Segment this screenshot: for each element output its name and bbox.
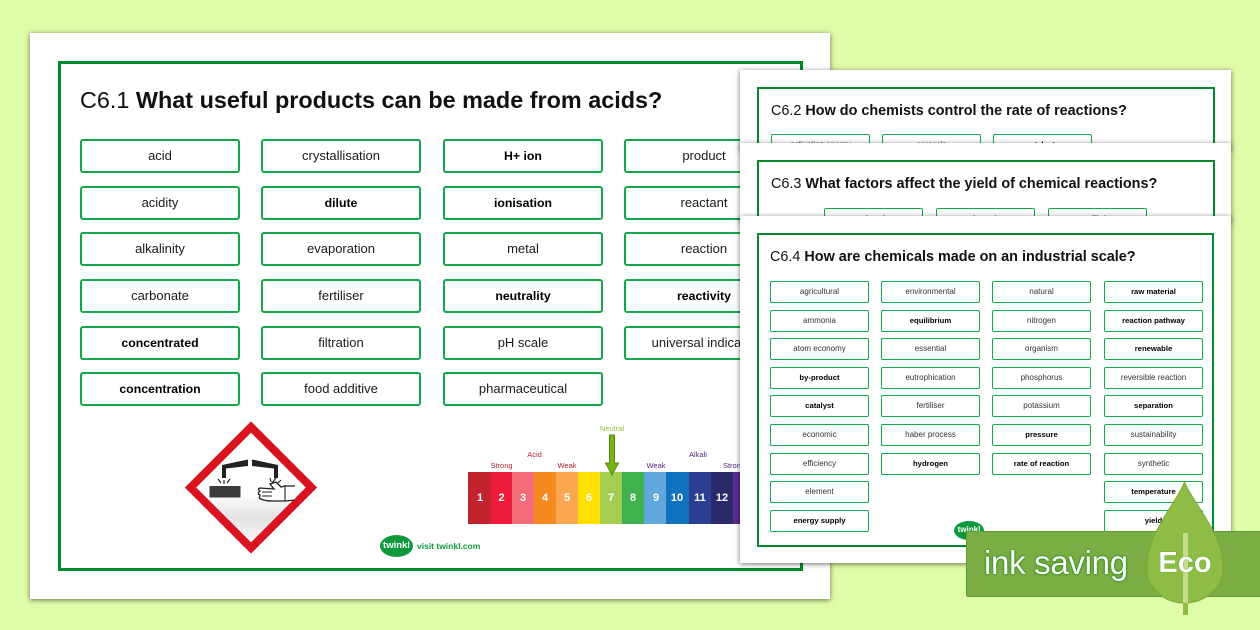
word card: phosphorus bbox=[1021, 373, 1062, 382]
word card bbox=[992, 367, 1091, 389]
banner text: ink saving bbox=[984, 544, 1128, 581]
word card: H+ ion bbox=[504, 149, 542, 163]
word card: essential bbox=[915, 344, 946, 353]
icon: Eco leaf bbox=[1146, 480, 1224, 615]
word card: evaporation bbox=[307, 241, 375, 256]
word card bbox=[624, 232, 784, 266]
word card bbox=[443, 326, 603, 360]
word card: yield bbox=[1145, 516, 1162, 525]
word card bbox=[770, 310, 869, 332]
word card bbox=[1104, 510, 1203, 532]
word card bbox=[770, 453, 869, 475]
word card: catalyst bbox=[805, 401, 834, 410]
word card: pressure bbox=[1025, 430, 1058, 439]
word card: temperature bbox=[1131, 487, 1176, 496]
word card bbox=[443, 372, 603, 406]
word card bbox=[261, 326, 421, 360]
word card: ammonia bbox=[803, 316, 836, 325]
logo: twinkl bbox=[380, 535, 480, 557]
word card: eutrophication bbox=[905, 373, 956, 382]
chart: pH scale: 9 bbox=[653, 492, 659, 504]
heading C6.1: C6.1 What useful products can be made from acids? bbox=[80, 87, 662, 113]
word card: reaction pathway bbox=[1122, 316, 1185, 325]
icon: Eco leaf: Eco bbox=[1158, 547, 1212, 579]
word card: pH scale bbox=[498, 335, 548, 350]
heading C6.3: C6.3 What factors affect the yield of chemical reactions? bbox=[771, 176, 1157, 192]
word card bbox=[443, 186, 603, 220]
word card bbox=[443, 279, 603, 313]
word card: neutrality bbox=[495, 289, 551, 303]
word card bbox=[624, 326, 784, 360]
logo: twinkl small bbox=[954, 521, 984, 540]
word card bbox=[261, 232, 421, 266]
word card: equilibrium bbox=[910, 316, 951, 325]
word card: renewable bbox=[1135, 344, 1172, 353]
word card bbox=[881, 281, 980, 303]
word card: synthetic bbox=[1138, 459, 1169, 468]
chart: pH scale bbox=[468, 424, 745, 524]
word card bbox=[1104, 395, 1203, 417]
word card: organism bbox=[1025, 344, 1058, 353]
word card bbox=[770, 281, 869, 303]
word card: concentrated bbox=[121, 336, 199, 350]
word card: fertiliser bbox=[318, 288, 364, 303]
word card: concentration bbox=[119, 382, 201, 396]
chart: pH scale: 4 bbox=[542, 492, 549, 504]
word card bbox=[1104, 310, 1203, 332]
word card bbox=[261, 139, 421, 173]
word card bbox=[443, 232, 603, 266]
word card bbox=[80, 279, 240, 313]
word card bbox=[80, 139, 240, 173]
word card: aerosols bbox=[916, 140, 947, 149]
word card bbox=[936, 208, 1035, 230]
word card: atom economy bbox=[793, 344, 846, 353]
word card: agricultural bbox=[800, 287, 839, 296]
word card: catalysts bbox=[1026, 140, 1059, 149]
word card: pharmaceutical bbox=[479, 381, 567, 396]
chart: pH scale: Strong bbox=[723, 461, 745, 470]
word card: equilibrium bbox=[1078, 214, 1117, 223]
word card: activation energy bbox=[790, 140, 851, 149]
word card bbox=[624, 139, 784, 173]
word card bbox=[1104, 338, 1203, 360]
word card: carbonate bbox=[131, 288, 189, 303]
word card: reactivity bbox=[677, 289, 731, 303]
word card bbox=[770, 395, 869, 417]
word card bbox=[770, 510, 869, 532]
word card bbox=[261, 279, 421, 313]
word card: universal indicator bbox=[652, 335, 756, 350]
chart: pH scale: Acid bbox=[527, 450, 542, 459]
word card: dilute bbox=[325, 196, 357, 210]
word card bbox=[882, 134, 981, 156]
chart: pH scale: 3 bbox=[520, 492, 526, 504]
word card bbox=[770, 367, 869, 389]
banner: ink saving bbox=[966, 531, 1260, 597]
word card bbox=[1104, 424, 1203, 446]
chart: pH scale: 6 bbox=[586, 492, 592, 504]
chart: pH scale: 5 bbox=[564, 492, 570, 504]
word card bbox=[261, 186, 421, 220]
word card bbox=[443, 139, 603, 173]
word card bbox=[881, 338, 980, 360]
word card bbox=[992, 395, 1091, 417]
word card bbox=[770, 338, 869, 360]
word card: by-product bbox=[799, 373, 840, 382]
word card: environmental bbox=[905, 287, 956, 296]
word card: sustainability bbox=[1131, 430, 1176, 439]
chart: pH scale: 8 bbox=[630, 492, 636, 504]
word card bbox=[881, 453, 980, 475]
word card bbox=[881, 367, 980, 389]
panel border bbox=[757, 160, 1215, 230]
word card bbox=[624, 279, 784, 313]
panel: C6.2 word mat bbox=[740, 70, 1231, 150]
word card: food additive bbox=[304, 381, 378, 396]
word card: element bbox=[805, 487, 834, 496]
word card: economic bbox=[802, 430, 837, 439]
twinkl badge: twinkl bbox=[383, 540, 410, 551]
word card bbox=[770, 424, 869, 446]
word card bbox=[992, 338, 1091, 360]
word card: ionisation bbox=[494, 196, 552, 210]
word card bbox=[80, 372, 240, 406]
word card: metal bbox=[507, 241, 539, 256]
word card bbox=[770, 481, 869, 503]
chart: pH scale: 1 bbox=[477, 492, 483, 504]
word card: fertiliser bbox=[916, 401, 944, 410]
panel border bbox=[757, 233, 1214, 547]
word card bbox=[1048, 208, 1147, 230]
heading C6.4: C6.4 How are chemicals made on an industrial scale? bbox=[770, 249, 1136, 265]
word card: efficiency bbox=[803, 459, 836, 468]
chart: pH scale: 2 bbox=[498, 492, 505, 504]
chart: pH scale: 10 bbox=[671, 492, 683, 504]
word card bbox=[80, 326, 240, 360]
word card: rate of reaction bbox=[1014, 459, 1069, 468]
word card: nitrogen bbox=[1027, 316, 1056, 325]
word card bbox=[261, 372, 421, 406]
word card: raw material bbox=[1131, 287, 1176, 296]
word card: product bbox=[682, 148, 726, 163]
word card: energy supply bbox=[793, 516, 846, 525]
twinkl badge bbox=[380, 535, 413, 557]
word card: acidity bbox=[142, 195, 178, 210]
chart: pH scale: Strong bbox=[490, 461, 513, 470]
chart: pH scale: 7 bbox=[608, 492, 614, 504]
panel: C6.4 word mat bbox=[740, 216, 1231, 563]
word card: separation bbox=[1134, 401, 1173, 410]
panel: C6.3 word mat bbox=[740, 143, 1231, 223]
word card: filtration bbox=[318, 335, 364, 350]
word card: crystallisation bbox=[302, 148, 380, 163]
word card: haber process bbox=[905, 430, 956, 439]
word card: reactant bbox=[680, 195, 727, 210]
word card: natural bbox=[1029, 287, 1054, 296]
word card bbox=[771, 134, 870, 156]
word card: closed bbox=[862, 214, 885, 223]
panel: C6.1 word mat bbox=[30, 33, 830, 599]
word card bbox=[993, 134, 1092, 156]
word card bbox=[1104, 453, 1203, 475]
word card: potassium bbox=[1023, 401, 1060, 410]
site address: visit twinkl.com bbox=[417, 541, 480, 551]
word card bbox=[992, 281, 1091, 303]
word card bbox=[992, 424, 1091, 446]
word card bbox=[881, 310, 980, 332]
word card: acid bbox=[148, 148, 172, 163]
chart: pH scale: Weak bbox=[646, 461, 666, 470]
word card bbox=[80, 232, 240, 266]
word card: reaction bbox=[681, 241, 727, 256]
icon: corrosive hazard diamond bbox=[184, 422, 318, 554]
word card bbox=[1104, 367, 1203, 389]
word card bbox=[992, 310, 1091, 332]
panel border bbox=[757, 87, 1215, 157]
word card bbox=[80, 186, 240, 220]
chart: pH scale: 12 bbox=[716, 492, 728, 504]
word card: alkalinity bbox=[135, 241, 185, 256]
word card bbox=[624, 186, 784, 220]
word card: reversible reaction bbox=[1121, 373, 1186, 382]
word card bbox=[881, 395, 980, 417]
chart: pH scale: 11 bbox=[694, 492, 706, 504]
panel border bbox=[58, 61, 803, 571]
word card bbox=[824, 208, 923, 230]
chart: pH scale: Alkali bbox=[689, 450, 707, 459]
word card bbox=[881, 424, 980, 446]
word card bbox=[1104, 481, 1203, 503]
heading C6.2: C6.2 How do chemists control the rate of reactions? bbox=[771, 103, 1127, 119]
word card: dynamic bbox=[971, 214, 1000, 223]
chart: pH scale: Neutral bbox=[600, 424, 624, 433]
word card bbox=[1104, 281, 1203, 303]
chart: pH scale: Weak bbox=[557, 461, 577, 470]
logo: twinkl small: twinkl bbox=[958, 525, 980, 534]
word card: hydrogen bbox=[913, 459, 948, 468]
word card bbox=[992, 453, 1091, 475]
